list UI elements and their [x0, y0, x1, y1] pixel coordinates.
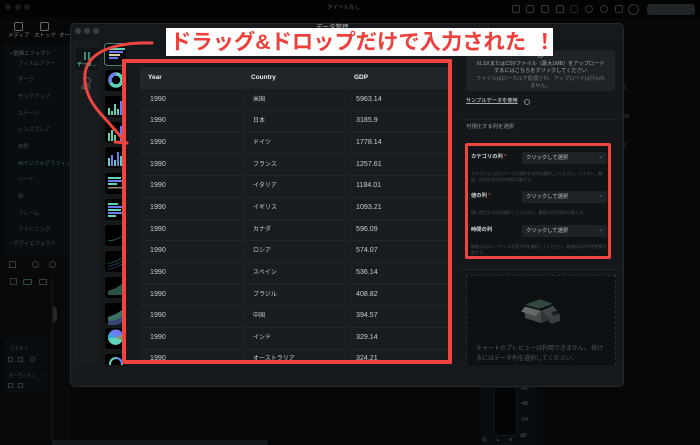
preview panel	[466, 275, 616, 365]
upload instructions: ません。	[530, 83, 551, 89]
right settings panel	[460, 40, 620, 365]
table rows: 1990	[150, 311, 166, 319]
audio meter: dB	[520, 433, 527, 439]
rail item: data	[76, 48, 99, 70]
red outline: table	[122, 59, 452, 364]
modal dialog	[70, 23, 624, 387]
timeline scrollbar	[52, 440, 268, 445]
table rows: 1990	[150, 160, 166, 168]
table rows	[150, 95, 382, 360]
modal title: データ管理	[316, 24, 348, 31]
effects sidebar: レンズフレア	[18, 127, 50, 133]
time select: クリックして選択	[526, 228, 568, 234]
upload box	[466, 50, 615, 91]
table rows: ドイツ	[253, 140, 271, 146]
table rows: イタリア	[253, 183, 277, 189]
effects sidebar: フィルムブラー	[18, 61, 55, 67]
track: video	[4, 338, 52, 369]
sample data link: サンプルデータを使用	[466, 98, 518, 104]
track: video: ビデオ 1	[10, 346, 27, 351]
rail item: data: データ…	[77, 62, 97, 68]
table rows: 574.07	[356, 246, 378, 254]
table rows: スペイン	[253, 270, 277, 276]
table rows: 1990	[150, 246, 166, 254]
audio meter: -42	[520, 386, 528, 392]
effects sidebar: ライトニング	[18, 227, 50, 233]
category select	[522, 152, 607, 164]
category column: カテゴリの列 *	[471, 154, 506, 160]
table rows: 329.14	[356, 333, 378, 341]
refresh icon	[524, 99, 530, 105]
table header: GDP	[354, 74, 368, 81]
table rows: イギリス	[253, 205, 277, 211]
table rows: フランス	[253, 162, 277, 168]
audio meter	[481, 387, 537, 445]
table rows: 1990	[150, 181, 166, 189]
effects sidebar: ハート	[18, 177, 34, 183]
audio meter: R	[509, 437, 512, 442]
section heading: 可視化する列を選択	[466, 124, 514, 130]
table rows: 394.57	[356, 311, 378, 319]
effects sidebar: フレーム	[18, 211, 39, 217]
value select	[522, 191, 607, 203]
value column: 値の列 *	[471, 193, 490, 199]
modal left rail	[73, 40, 102, 365]
upload instructions: するにはこちらをクリックしてください	[494, 68, 587, 74]
value select: ⌄	[599, 193, 603, 199]
rail item: attributes: 属性	[81, 85, 91, 91]
timeline tools	[4, 256, 70, 440]
audio meter: -48	[520, 401, 528, 407]
media tabs	[8, 22, 70, 39]
upload instructions	[476, 60, 605, 89]
effects sidebar: 枠	[18, 194, 23, 200]
table rows: 1990	[150, 203, 166, 211]
audio meter: -54	[520, 417, 528, 423]
player edge numbers	[623, 85, 629, 149]
table rows: 596.09	[356, 225, 378, 233]
table rows: 1990	[150, 95, 166, 103]
time column: 時間の列	[471, 227, 492, 233]
player edge numbers: 0	[623, 143, 626, 149]
icon: upload	[537, 51, 544, 58]
table rows: カナダ	[253, 227, 271, 233]
table rows: 1184.01	[356, 181, 381, 189]
table rows: 中国	[253, 313, 265, 319]
red arrow	[83, 41, 154, 144]
category select: クリックして選択	[526, 155, 568, 161]
table rows: 1990	[150, 225, 166, 233]
app top bar: タイトルなし	[327, 5, 360, 11]
effects sidebar: モックアップ	[18, 94, 50, 100]
upload instructions: XLSXまたはCSVファイル（最大1MB）をアップロード	[476, 61, 604, 67]
table rows: 1990	[150, 268, 166, 276]
effects sidebar: ダーク	[18, 77, 34, 83]
table rows: 1257.61	[356, 160, 382, 168]
data table	[126, 63, 448, 360]
callout banner	[166, 28, 553, 56]
media tabs: メディア	[8, 33, 30, 39]
rail item: attributes	[81, 77, 91, 91]
player edge numbers: 09	[623, 114, 629, 120]
effects sidebar: • ボディエフェクト	[10, 241, 56, 247]
category select: ⌄	[599, 154, 603, 160]
table body	[140, 67, 448, 360]
media tabs: オー	[59, 33, 70, 39]
table rows: 1093.21	[356, 203, 382, 211]
table rows: 536.14	[356, 268, 378, 276]
time select: ⌄	[599, 227, 603, 233]
player edge numbers: 0	[623, 85, 626, 91]
table rows: 408.82	[356, 290, 378, 298]
track: audio: オーディオ 1	[9, 373, 35, 378]
value hint: 値に使用する列を選択してください。数値の列が使用可能です。	[471, 210, 586, 215]
effects sidebar: • 動画エフェクト	[10, 51, 51, 57]
table rows: 5963.14	[356, 95, 382, 103]
table rows: 米国	[253, 97, 265, 103]
category hint: カテゴリまたはグループに使用する列を選択してください。テキスト、数値、日付形式の列が使用可能です。	[471, 171, 602, 182]
effects sidebar: 自然	[18, 144, 29, 150]
table rows: 1990	[150, 290, 166, 298]
table header: Country	[251, 74, 276, 81]
table header	[140, 67, 448, 89]
track: audio	[4, 370, 52, 392]
column selectors	[468, 146, 608, 256]
window controls	[75, 28, 99, 34]
icon: empty box	[521, 300, 560, 324]
audio meter: L	[497, 437, 500, 442]
table rows: 1990	[150, 116, 166, 124]
table rows: インド	[253, 335, 271, 341]
chart thumbnail list	[104, 43, 126, 365]
callout text: ドラッグ&ドロップだけで入力された ！	[170, 30, 553, 54]
table rows: 3185.9	[356, 116, 378, 124]
app top bar	[0, 0, 700, 18]
table rows: ロシア	[253, 248, 271, 254]
value select: クリックして選択	[526, 194, 568, 200]
time select	[522, 225, 607, 237]
table header: Year	[148, 74, 162, 81]
table rows: 1778.14	[356, 138, 382, 146]
effects sidebar: ステージ	[18, 111, 39, 117]
red outline: column selectors	[465, 143, 611, 259]
media tabs: ストック	[34, 33, 56, 39]
effects sidebar: AIインフォグラフィック	[18, 161, 77, 167]
table rows: 日本	[253, 118, 265, 124]
effects sidebar	[4, 44, 70, 256]
preview message: チャートのプレビューは利用できません。 続けるにはデータ列を選択してください。	[476, 346, 603, 362]
upload instructions: ファイルはローカルで処理され、アップロードは行われ	[476, 76, 605, 82]
table rows: 1990	[150, 333, 166, 341]
timeline playhead	[52, 306, 57, 323]
time hint: 時間またはシーケンスを表す列を選択してください。数値形式の列が使用可能です。	[471, 244, 607, 255]
table rows: 1990	[150, 138, 166, 146]
table rows: ブラジル	[253, 292, 277, 298]
